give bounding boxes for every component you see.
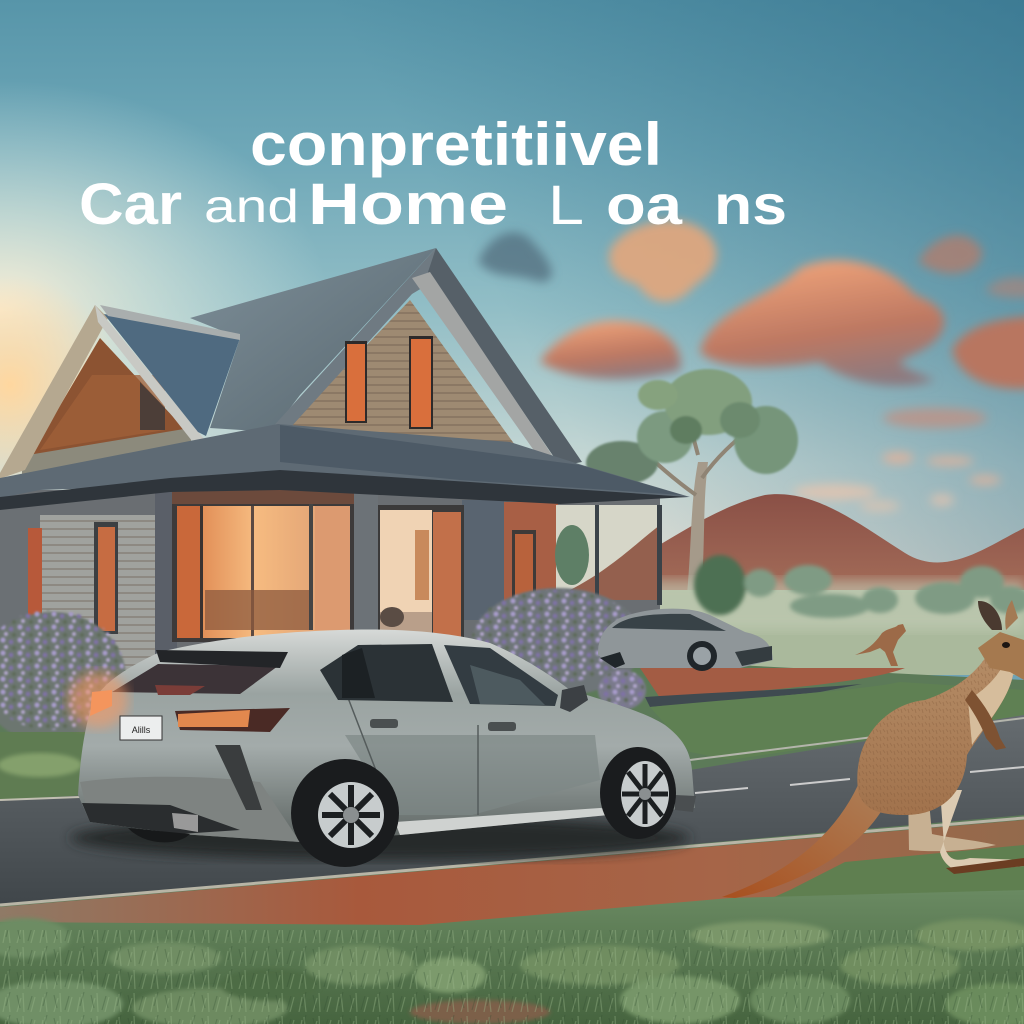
title line 2: L bbox=[548, 173, 584, 236]
clouds bbox=[478, 220, 1024, 512]
large windows bbox=[172, 485, 464, 642]
main kangaroo bbox=[722, 600, 1024, 898]
title line 2: and bbox=[204, 180, 299, 232]
near leg bbox=[940, 790, 1024, 872]
title line 2: Car bbox=[79, 172, 182, 237]
title line 2: oa bbox=[606, 173, 683, 236]
license plate: Alills bbox=[132, 725, 151, 735]
tail bbox=[722, 785, 885, 898]
lower bumper bbox=[82, 803, 240, 834]
side windows bbox=[320, 644, 453, 702]
far leg bbox=[908, 790, 996, 851]
left lawn bbox=[0, 732, 130, 800]
door handles bbox=[370, 719, 398, 728]
foreground dirt bbox=[0, 820, 1024, 930]
hidden rear tyre bbox=[128, 828, 190, 842]
title line 1: conpretitiivel bbox=[250, 111, 662, 178]
distant hills bbox=[570, 494, 1024, 640]
background ground bbox=[0, 650, 1024, 1024]
car shadow bbox=[70, 816, 690, 860]
torso bbox=[857, 650, 1014, 815]
house bbox=[0, 248, 690, 670]
head bbox=[978, 632, 1024, 680]
rear window and spoiler bbox=[112, 664, 278, 694]
distant silver car bbox=[598, 609, 773, 671]
gable windows bbox=[345, 336, 433, 429]
car body bbox=[78, 630, 695, 842]
ears bbox=[978, 601, 1002, 630]
gable upper wall bbox=[290, 300, 515, 445]
license plate bbox=[120, 716, 162, 740]
verandah roof bbox=[0, 424, 690, 510]
near foot bbox=[946, 858, 1024, 874]
rear wheel bbox=[291, 759, 399, 867]
tail lights bbox=[90, 690, 112, 716]
road bbox=[0, 715, 1024, 905]
title line 2: ns bbox=[714, 173, 787, 236]
chest bbox=[968, 660, 1014, 745]
front wheel bbox=[600, 747, 676, 839]
main car bbox=[68, 630, 696, 867]
wing mirror bbox=[560, 685, 588, 712]
sky background bbox=[0, 0, 1024, 620]
eye bbox=[1002, 642, 1010, 648]
title bbox=[79, 111, 787, 237]
forearm bbox=[965, 690, 1006, 750]
gum tree bbox=[586, 369, 798, 606]
main roof bbox=[100, 248, 582, 466]
lavender shrubs bbox=[0, 588, 646, 744]
right grass patch bbox=[700, 845, 1024, 930]
foreground grass bbox=[0, 890, 1024, 1024]
house lower walls bbox=[0, 490, 662, 670]
title line 2: Home bbox=[308, 172, 508, 237]
title line 2 bbox=[79, 172, 787, 237]
paddock and distant shrubs bbox=[560, 555, 1024, 675]
left gable bbox=[0, 305, 205, 482]
distant kangaroo bbox=[855, 624, 906, 666]
